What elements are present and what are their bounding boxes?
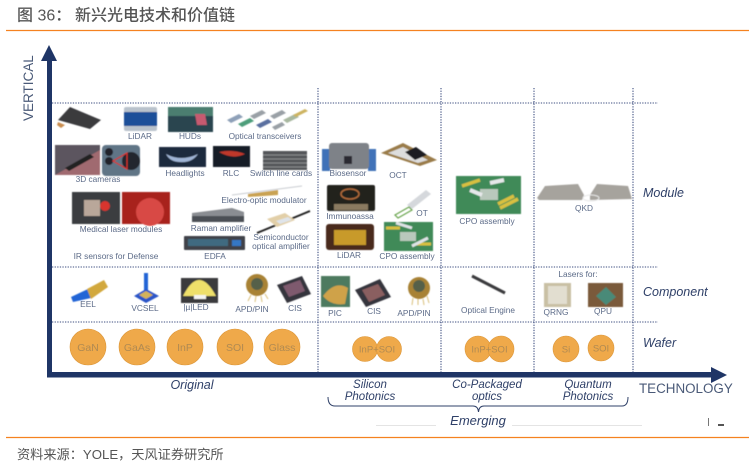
text block: component labels: |µ|LED [183, 302, 209, 312]
icon: VCSEL [134, 273, 159, 303]
panel: wafer circles emerging: InP+SOI [471, 344, 508, 356]
text block: silicon photonics module labels: CPO assembly [379, 251, 436, 261]
panel: wafer circles emerging [352, 335, 614, 362]
icon: RLC [213, 146, 250, 167]
text block: original module labels: Semiconductor [253, 232, 309, 242]
icon: APD/PIN 2 [408, 277, 430, 305]
label: Quantum Photonics: Photonics [563, 391, 613, 403]
label: Silicon Photonics: Photonics [345, 391, 395, 403]
text block: original module labels: HUDs [179, 131, 201, 141]
text block: original module labels: LiDAR [128, 131, 152, 141]
label: Module: Module [643, 186, 684, 200]
label: Silicon Photonics [345, 379, 395, 403]
horizontal axis label: TECHNOLOGY [639, 381, 733, 396]
text block: component labels: QRNG [544, 307, 568, 317]
panel: wafer circles emerging: Si [562, 344, 570, 356]
icon: APD/PIN [246, 274, 268, 302]
clipped slide footer [376, 418, 724, 426]
text block: component labels: CIS [288, 303, 302, 313]
text block: silicon photonics module labels: Immunoassa [326, 211, 374, 221]
panel: wafer circles original: GaN [77, 342, 99, 354]
label: Original: Original [170, 378, 215, 392]
label: Co-Packaged optics: Co-Packaged [452, 379, 522, 391]
icon: EEL [71, 280, 108, 302]
icon: lidar sensor [124, 107, 157, 131]
icon: biosensor [322, 143, 376, 171]
text block: component labels [80, 269, 612, 318]
panel: wafer circles original: InP [177, 342, 193, 354]
icon: switch line cards [263, 151, 307, 170]
icon: medical laser devices [72, 192, 170, 226]
label: Silicon Photonics: Silicon [353, 379, 387, 391]
label: Co-Packaged optics [452, 379, 522, 403]
text block: component labels: CIS [367, 306, 381, 316]
text block: original module labels: Optical transceivers [229, 131, 301, 141]
label: Wafer: Wafer [643, 336, 677, 350]
text block: silicon photonics module labels: Biosensor [330, 168, 367, 178]
icon: PIC [321, 276, 350, 307]
text block: original module labels: RLC [223, 168, 239, 178]
panel: wafer circles original: SOI [226, 342, 244, 354]
icon: OT transceiver [395, 190, 431, 218]
text block: silicon photonics module labels: OCT [389, 170, 407, 180]
panel: wafer circles original [70, 329, 300, 365]
panel: original module images [55, 107, 310, 250]
icon: lidar die [326, 224, 374, 250]
vertical axis arrow [41, 45, 57, 377]
text block: silicon photonics module labels [326, 168, 436, 261]
source note: 资料来源：YOLE，天风证券研究所 [17, 447, 224, 462]
label: Component: Component [643, 285, 708, 299]
icon: OCT [381, 143, 437, 166]
text block: component labels: Optical Engine [461, 305, 515, 315]
panel: QKD [537, 184, 632, 213]
icon: HUD [168, 107, 213, 132]
text block: silicon photonics module labels: OT [416, 208, 428, 218]
icon: immunoassay [327, 185, 375, 211]
icon: headlights [159, 147, 206, 167]
brace: emerging [328, 397, 628, 412]
grid lines [52, 88, 658, 372]
text block: component labels: APD/PIN [397, 308, 431, 318]
icon: display panel [57, 107, 101, 129]
text block: original module labels: optical amplifier [252, 241, 310, 251]
text block: component labels: Lasers for: [558, 269, 598, 279]
text block: original module labels: IR sensors for Defense [74, 251, 159, 261]
icon: 3D cameras [55, 145, 140, 176]
icon: CPO assembly large [456, 176, 521, 214]
icon: optical engine [472, 276, 505, 293]
panel: wafer circles original: Glass [269, 342, 295, 354]
panel: wafer circles original: GaAs [124, 342, 150, 354]
label: Quantum Photonics [563, 379, 613, 403]
text block: silicon photonics module labels: LiDAR [337, 250, 361, 260]
panel: silicon photonics modules [322, 143, 437, 251]
title: 图 36： [17, 8, 71, 24]
text block: original module labels: 3D cameras [76, 174, 120, 184]
icon: micro LED [181, 278, 218, 303]
text block: original module labels: Electro-optic modulator [221, 195, 307, 205]
text block: component labels: QPU [594, 306, 612, 316]
text block: original module labels [74, 131, 312, 261]
icon: QRNG chip [544, 283, 571, 307]
text block: component labels: PIC [328, 308, 342, 318]
label: Emerging: Emerging [450, 413, 507, 428]
text block: original module labels: Raman amplifier [191, 223, 251, 233]
icon: electro-optic modulator [232, 186, 302, 197]
horizontal axis arrow [47, 367, 727, 383]
panel: component row images [71, 273, 623, 307]
text block: component labels: EEL [80, 299, 96, 309]
text block: component labels: APD/PIN [235, 304, 269, 314]
label: QKD: QKD [575, 203, 593, 213]
icon: CPO assembly small [384, 222, 433, 251]
label: CPO assembly: CPO assembly [459, 216, 516, 226]
title: 新兴光电技术和价值链 [75, 6, 235, 24]
icon: CIS 2 [355, 279, 391, 307]
panel: wafer circles emerging: SOI [593, 344, 609, 354]
icon: optical transceivers [227, 109, 308, 130]
panel: wafer circles emerging: InP+SOI [359, 344, 395, 356]
text block: original module labels: Switch line cards [250, 168, 312, 178]
vertical axis label: VERTICAL [21, 55, 36, 121]
panel: CPO assembly [456, 176, 521, 226]
icon: semiconductor optical amplifier [257, 211, 310, 233]
icon: Raman amplifier [192, 208, 244, 222]
label: Co-Packaged optics: optics [472, 391, 502, 403]
text block: original module labels: EDFA [204, 251, 226, 261]
text block: component labels: VCSEL [131, 303, 159, 313]
icon: CIS [277, 276, 311, 303]
icon: EDFA [184, 236, 245, 250]
icon: QPU chip [588, 283, 623, 307]
text block: original module labels: Headlights [165, 168, 205, 178]
label: Quantum Photonics: Quantum [564, 379, 612, 391]
icon: QKD devices [537, 184, 632, 201]
text block: original module labels: Medical laser modules [80, 224, 162, 234]
